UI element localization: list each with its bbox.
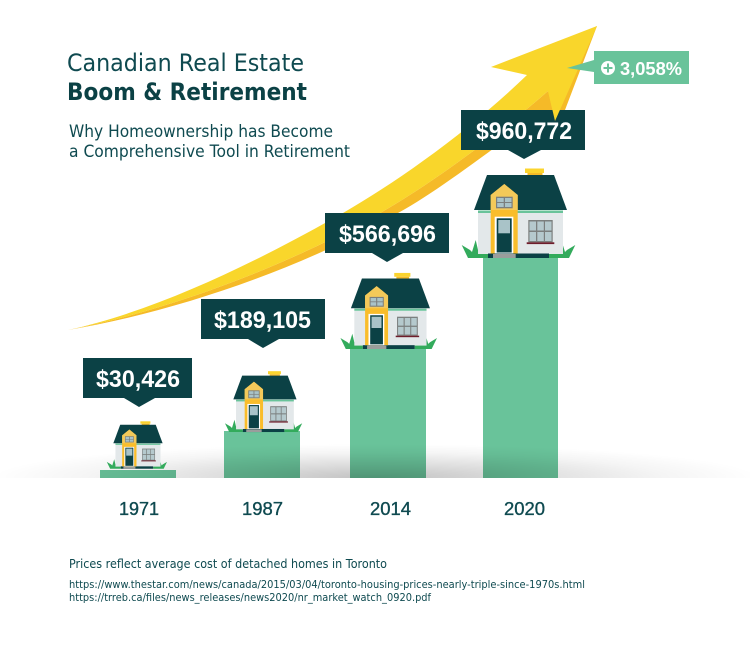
year 2020: 2020 xyxy=(504,499,545,519)
title xyxy=(67,49,307,106)
title: Canadian Real Estate xyxy=(67,49,304,77)
year 2014: 2014 xyxy=(370,499,411,519)
house 2020 xyxy=(462,168,575,258)
price label 2014 xyxy=(325,213,449,262)
year 1971: 1971 xyxy=(119,499,159,519)
subtitle: Why Homeownership has Become xyxy=(69,122,333,141)
bar: 1971 xyxy=(100,470,176,478)
house 2014 xyxy=(340,273,437,349)
price label 2014: $566,696 xyxy=(339,221,436,248)
price label 2020: $960,772 xyxy=(476,118,572,145)
callout: 3,058%: 3,058% xyxy=(620,59,682,79)
footnote: Prices reflect average cost of detached homes in Toronto xyxy=(69,556,387,571)
title: Boom & Retirement xyxy=(67,78,307,106)
bar: 2014 xyxy=(350,349,426,478)
ground shadow xyxy=(0,440,750,478)
arrow head tip over label xyxy=(548,26,597,121)
price label 1987: $189,105 xyxy=(214,307,311,334)
price label 1971 xyxy=(83,358,192,407)
price label 2020 xyxy=(461,110,585,159)
subtitle: a Comprehensive Tool in Retirement xyxy=(69,142,350,161)
sources: https://trreb.ca/files/news_releases/news2020/nr_market_watch_0920.pdf xyxy=(69,592,431,604)
bar: 2020 xyxy=(483,258,558,478)
sources xyxy=(69,579,585,604)
sources: https://www.thestar.com/news/canada/2015/03/04/toronto-housing-prices-nearly-triple-since-1970s.html xyxy=(69,579,585,591)
price label 1987 xyxy=(201,299,325,348)
bar: 1987 xyxy=(224,431,300,478)
growth arrow xyxy=(68,26,597,330)
house 1971 xyxy=(107,421,167,469)
subtitle xyxy=(69,122,350,161)
icon: plus xyxy=(601,61,615,75)
price label 1971: $30,426 xyxy=(96,366,180,393)
house 1987 xyxy=(225,371,302,432)
year 1987: 1987 xyxy=(242,499,283,519)
callout: 3,058% xyxy=(567,51,689,84)
